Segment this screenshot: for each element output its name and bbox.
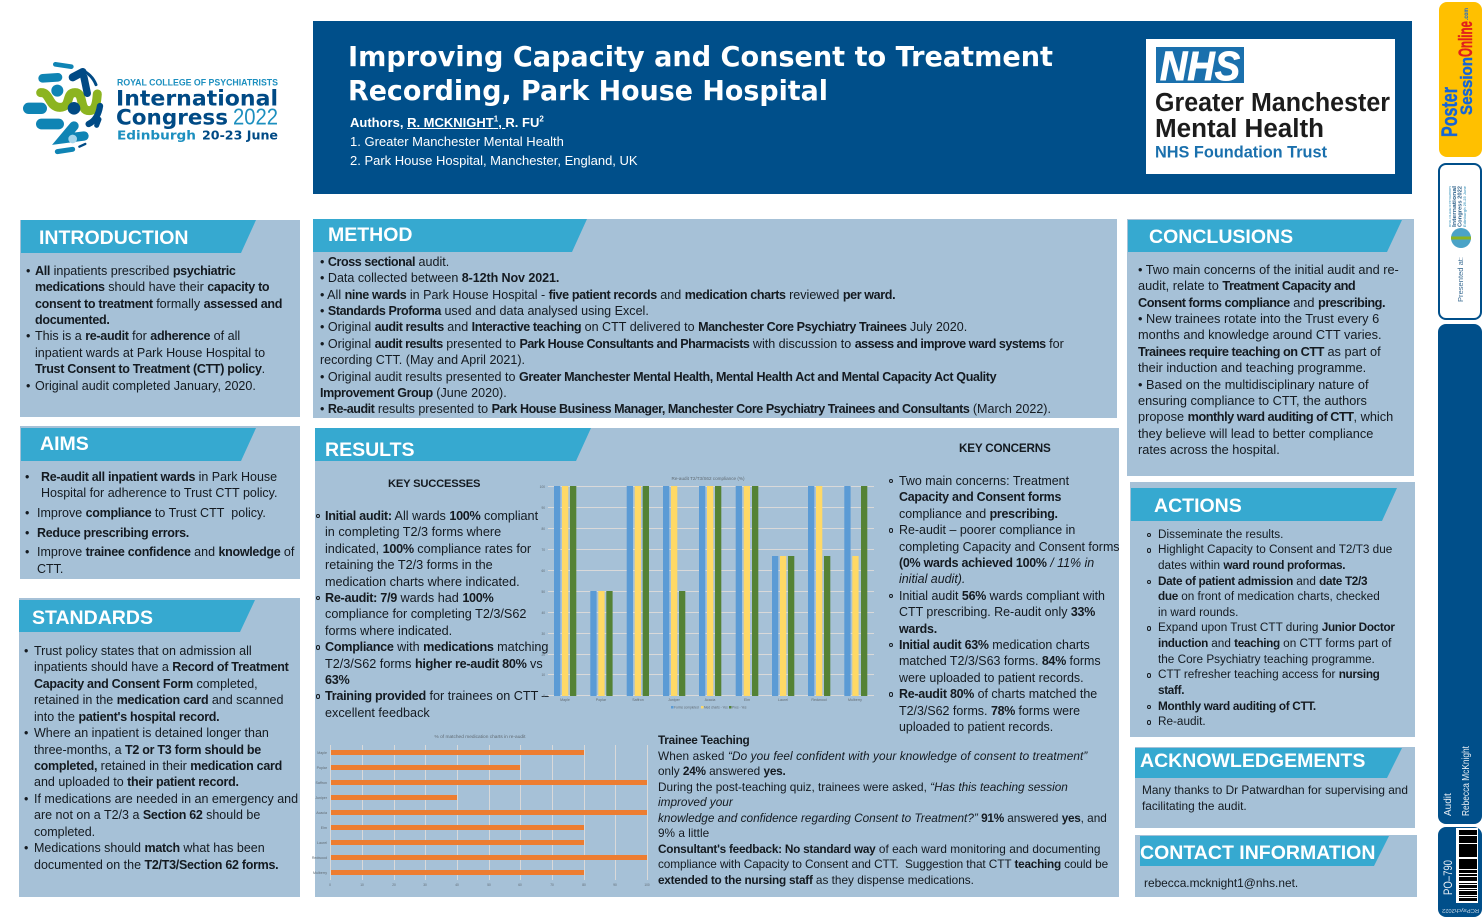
heading [19,600,255,632]
trust name [1155,89,1390,162]
key concerns list: Two main concerns: Treatment [899,474,1069,488]
logo: RCPsych International Congress 2022: ROYAL COLLEGE OF PSYCHIATRISTS [117,78,278,88]
chart legend [671,706,747,710]
text: documented. [35,313,110,327]
NHS lozenge: NHS [1160,43,1240,89]
text: • All nine wards in Park House Hospital - five patient records and medication charts reviewed per ward. [320,288,895,302]
text: • [24,841,28,855]
NHS logo [1146,39,1395,174]
heading: CONTACT INFORMATION [1140,842,1375,864]
text: • Data collected between 8-12th Nov 2021. [320,271,559,285]
heading [21,428,256,461]
text: completed. [34,825,95,839]
bar chart: re-audit compliance [540,476,874,710]
logo: RCPsych International Congress 2022: International [116,86,278,112]
text: • Based on the multidisciplinary nature of [1138,377,1369,392]
text: If medications are needed in an emergency and [34,792,298,806]
rotated label and congress mini logo: International [1452,185,1458,227]
bar chart: matched medication charts: 100 [644,883,650,887]
text: completed, retained in their medication card [34,759,282,773]
text: • [26,379,30,393]
trust name: Mental Health [1155,115,1324,143]
rotated poster number [1441,860,1479,913]
text: Re-audit. [1158,715,1206,728]
key concerns list: wards. [899,622,937,636]
key successes list [316,509,549,720]
key concerns list: Re-audit – poorer compliance in [899,523,1075,537]
bar chart: matched medication charts: Poplar [317,766,328,770]
rotated wordmark [1437,8,1477,137]
text: inpatients should have a Record of Treatment [34,660,289,674]
bar chart: matched medication charts: 70 [550,883,554,887]
key concerns list: were uploaded to patient records. [899,671,1084,685]
heading [1128,220,1402,252]
heading: INTRODUCTION [39,226,188,248]
text: months and knowledge around CTT varies. [1138,327,1382,342]
text: Where an inpatient is detained longer than [34,726,269,740]
key concerns list: Initial audit 63% medication charts [899,638,1090,652]
text: retained in the medication card and scanned [34,693,283,707]
text: • [26,264,30,278]
text: audit, relate to Treatment Capacity and [1138,278,1355,293]
authors: 1. Greater Manchester Mental Health [350,134,564,149]
text: Trainees require teaching on CTT as part of [1138,344,1381,359]
heading [1135,748,1402,778]
text: Trust Consent to Treatment (CTT) policy. [35,362,265,376]
text: • Original audit results presented to Park House Consultants and Pharmacists with discussion to assess and improve ward systems for [320,337,1064,351]
key successes list: medication charts where indicated. [325,575,520,589]
key successes list: forms where indicated. [325,624,452,638]
text: rates across the hospital. [1138,442,1280,457]
bar chart: matched medication charts: Saffron [315,781,327,785]
text: • [25,526,29,540]
bar chart: matched medication charts [312,734,650,887]
bar chart: re-audit compliance: 80 [541,527,545,531]
text: • Two main concerns of the initial audit and re- [1138,262,1399,277]
text: Expand upon Trust CTT during Junior Doctor [1158,621,1395,634]
bar chart: re-audit compliance: Juniper [668,698,681,702]
text: All inpatients prescribed psychiatric [35,264,236,278]
bar chart: re-audit compliance: Acacia [705,698,715,702]
bar chart: re-audit compliance: Maple [560,698,570,702]
bar chart: re-audit compliance: 10 [541,673,545,677]
key concerns list: Re-audit 80% of charts matched the [899,687,1097,701]
bar chart: re-audit compliance: 50 [541,590,545,594]
trainee teaching text: 9% a little [658,826,709,840]
text: • New trainees rotate into the Trust every 6 [1138,311,1379,326]
bar chart: re-audit compliance: Laurel [778,698,788,702]
heading: RESULTS [325,438,415,460]
text: consent to treatment formally assessed and [35,297,282,311]
panel: introduction [20,220,300,417]
text: Improve compliance to Trust CTT policy. [37,506,266,520]
heading: CONCLUSIONS [1149,226,1293,248]
text [1142,783,1408,813]
trainee teaching text: only 24% answered yes. [658,764,785,778]
heading: AIMS [40,432,89,454]
bar chart: matched medication charts: Elm [321,826,327,830]
rotated labels: Rebecca McKnight [1461,746,1472,816]
bar chart: matched medication charts: Juniper [315,796,328,800]
text: • Cross sectional audit. [320,255,449,269]
key successes list: Initial audit: All wards 100% compliant [325,509,538,523]
trainee teaching text [658,733,1108,887]
rotated label and congress mini logo [1448,185,1471,302]
key successes list: excellent feedback [325,706,430,720]
key concerns list: matched T2/3/S63 forms. 84% forms [899,654,1101,668]
panel: aims [20,426,300,579]
rotated poster number: PO–790 [1441,860,1455,895]
logo: RCPsych International Congress 2022 [23,62,278,154]
text: Monthly ward auditing of CTT. [1158,700,1316,713]
heading [1131,488,1397,521]
barcode [1456,828,1478,903]
rotated label and congress mini logo: Edinburgh 20-23 June [1463,186,1467,227]
bar chart: re-audit compliance: Saffron [632,698,644,702]
bar chart: matched medication charts: 0 [329,883,331,887]
trainee teaching text: improved your [658,795,733,809]
side tab: audit and author [1438,324,1482,824]
chart title: Re-audit T2/T3/S62 compliance (%) [672,476,745,481]
text: recording CTT. (May and April 2021). [320,353,525,367]
heading: ACTIONS [1154,494,1242,516]
bar chart: matched medication charts: Maple [317,751,327,755]
panel: method [313,219,1117,418]
text: the Core Psychiatry teaching programme. [1158,653,1375,666]
panel: conclusions [1127,219,1414,476]
key successes list: 63% [325,673,349,687]
text: ensuring compliance to CTT, the authors [1138,393,1367,408]
bar chart: re-audit compliance: Mulberry [848,698,862,702]
heading: key concerns: KEY CONCERNS [959,442,1051,455]
key successes list: retaining the T2/3 forms in the [325,558,493,572]
text: facilitating the audit. [1142,799,1247,813]
side tab: poster number and barcode [1438,827,1482,917]
text: Improvement Group (June 2020). [320,386,507,400]
logo: RCPsych International Congress 2022: 20-23 June [202,128,278,142]
trust name: Greater Manchester [1155,89,1390,117]
panel: contact information [1135,835,1417,897]
bar chart: re-audit compliance: 20 [541,653,545,657]
text: • Standards Proforma used and data analysed using Excel. [320,304,649,318]
bar chart: matched medication charts: 80 [582,883,586,887]
text: Many thanks to Dr Patwardhan for supervising and [1142,783,1408,797]
text: • [26,329,30,343]
text [1147,528,1395,728]
text: into the patient's hospital record. [34,710,219,724]
bar chart: matched medication charts: 40 [455,883,459,887]
text: Consent forms compliance and prescribing. [1138,295,1385,310]
heading [21,220,256,253]
key concerns list: T2/3/S62 forms. 78% forms were [899,704,1080,718]
text: Original audit completed January, 2020. [35,379,256,393]
trainee teaching text: extended to the nursing staff as they dispense medications. [658,873,974,887]
text: Highlight Capacity to Consent and T2/T3 due [1158,543,1392,556]
text: their induction and teaching programme. [1138,360,1366,375]
key successes list: T2/3/S62 forms higher re-audit 80% vs [325,657,543,671]
text: Re-audit all inpatient wards in Park House [41,470,277,484]
text: are not on a T2/3 a Section 62 should be [34,808,260,822]
text: Date of patient admission and date T2/3 [1158,575,1367,588]
rotated labels: Audit [1443,793,1454,816]
text: • [25,470,29,484]
bar chart: re-audit compliance: 70 [541,548,545,552]
text: medications should have their capacity to [35,280,269,294]
key concerns list: initial audit). [899,572,965,586]
text: CTT. [37,562,63,576]
panel: acknowledgements [1135,747,1415,828]
text: dates within ward round proformas. [1158,559,1345,572]
bar chart: matched medication charts: 50 [487,883,491,887]
key concerns list: (0% wards achieved 100% / 11% in [899,556,1094,570]
text: • Original audit results presented to Greater Manchester Mental Health, Mental Health Act and Mental Capacity Act Quality [320,370,996,384]
key successes list: Training provided for trainees on CTT – [325,689,549,703]
heading: METHOD [328,224,412,246]
trainee teaching text: When asked “Do you feel confident with your knowledge of consent to treatment” [658,749,1087,763]
key concerns list: Capacity and Consent forms [899,490,1061,504]
chart legend: Forms completed [674,706,699,710]
heading: STANDARDS [32,606,153,628]
key concerns list: CTT prescribing. Re-audit only 33% [899,605,1095,619]
bar chart: re-audit compliance: Elm [744,698,750,702]
bar chart: matched medication charts: Redwood [312,856,327,860]
bar chart: matched medication charts: 90 [613,883,617,887]
key successes list: indicated, 100% compliance rates for [325,542,531,556]
panel: results [315,428,1119,897]
text: rebecca.mcknight1@nhs.net. [1144,876,1298,890]
text: • [25,506,29,520]
trust name: NHS Foundation Trust [1155,142,1327,162]
text: Hospital for adherence to Trust CTT policy. [41,486,277,500]
text: • [24,644,28,658]
rotated label and congress mini logo: Presented at: [1456,257,1465,302]
text: propose monthly ward auditing of CTT, which [1138,409,1393,424]
trainee teaching text: knowledge and confidence regarding Consent to Treatment?” 91% answered yes, and [658,811,1107,825]
rotated label and congress mini logo: ROYAL COLLEGE OF PSYCHIATRISTS [1448,186,1452,227]
bar chart: re-audit compliance: 0 [543,694,545,698]
bar chart: matched medication charts: 30 [423,883,427,887]
bar chart: matched medication charts: 20 [392,883,396,887]
key concerns list: completing Capacity and Consent forms [899,540,1120,554]
text: • Original audit results and Interactive teaching on CTT delivered to Manchester Core Psychiatry Trainees July 2020. [320,320,967,334]
trainee teaching text: compliance with Capacity to Consent and CTT. Suggestion that CTT teaching could be [658,857,1108,871]
text: induction and teaching on CTT forms part of [1158,637,1391,650]
heading [1140,836,1389,866]
key successes list: compliance for completing T2/3/S62 [325,607,526,621]
logo: RCPsych International Congress 2022: 2022 [233,104,278,130]
text: • [25,545,29,559]
bar chart: re-audit compliance: 90 [541,506,545,510]
key successes list: Compliance with medications matching [325,640,548,654]
text: and uploaded to their patient record. [34,775,239,789]
text: they believe will lead to better compliance [1138,426,1373,441]
text: Capacity and Consent Form completed, [34,677,258,691]
text: • [24,726,28,740]
text: inpatient wards at Park House Hospital to [35,346,265,360]
side tab: Poster Session Online [1439,2,1482,157]
text: Reduce prescribing errors. [37,526,189,540]
chart title: % of matched medication charts in re-audit [435,734,526,740]
key concerns list [889,474,1120,734]
heading: key successes: KEY SUCCESSES [388,478,480,490]
text: three-months, a T2 or T3 form should be [34,742,261,756]
text [1138,262,1399,457]
bar chart: re-audit compliance: 60 [541,569,545,573]
text: This is a re-audit for adherence of all [35,329,240,343]
text: CTT refresher teaching access for nursing [1158,668,1380,681]
bar chart: re-audit compliance: Poplar [596,698,607,702]
rotated labels [1443,746,1472,816]
bar chart: re-audit compliance: 40 [541,611,545,615]
text [24,644,298,872]
header banner [313,21,1412,194]
title [348,40,1053,107]
bar chart: re-audit compliance: 30 [541,632,545,636]
text: Improve trainee confidence and knowledge of [37,545,294,559]
text: staff. [1158,684,1184,697]
logo: RCPsych International Congress 2022: Congress [116,106,228,130]
text: documented on the T2/T3/Section 62 forms. [34,858,278,872]
authors: 2. Park House Hospital, Manchester, England, UK [350,153,638,168]
text: • [24,792,28,806]
panel: actions [1130,482,1415,737]
key concerns list: Initial audit 56% wards compliant with [899,589,1105,603]
heading: ACKNOWLEDGEMENTS [1140,750,1365,772]
bar chart: matched medication charts: Acacia [316,811,327,815]
key concerns list: compliance and prescribing. [899,507,1058,521]
title: Improving Capacity and Consent to Treatment [348,40,1053,73]
chart legend: Med charts - Yes [704,706,728,710]
bar chart: matched medication charts: Mulberry [313,871,327,875]
bar chart: matched medication charts: 10 [360,883,364,887]
key concerns list: uploaded to patient records. [899,720,1053,734]
panel: standards [19,598,300,897]
bar chart: re-audit compliance: 100 [540,485,545,489]
text: Medications should match what has been [34,841,265,855]
heading [315,428,591,461]
trainee teaching text: Trainee Teaching [658,733,750,747]
authors: Authors, R. MCKNIGHT1, R. FU2 [350,115,544,130]
title: Recording, Park House Hospital [348,74,828,107]
key successes list: Re-audit: 7/9 wards had 100% [325,591,493,605]
bar chart: re-audit compliance: Redwood [811,698,827,702]
text: Disseminate the results. [1158,528,1283,541]
text: • Re-audit results presented to Park House Business Manager, Manchester Core Psychiatry Trainees and Consultants (March 2022). [320,402,1051,416]
bar chart: matched medication charts: 60 [518,883,522,887]
text [320,255,1064,416]
rotated poster number: RCPsych2022 [1442,907,1479,913]
text: in ward rounds. [1158,606,1238,619]
text: Trust policy states that on admission all [34,644,252,658]
text [25,470,294,576]
heading [313,219,587,252]
chart legend: Pres - Yes [732,706,747,710]
rotated label and congress mini logo: Congress 2022 [1458,186,1464,227]
rotated wordmark: Poster [1437,87,1462,137]
authors [350,115,638,168]
rotated wordmark: Session [1457,57,1476,115]
trainee teaching text: Consultant's feedback: No standard way of each ward monitoring and documenting [658,842,1100,856]
bar chart: matched medication charts: Laurel [317,841,327,845]
text [26,264,282,393]
key successes list: in completing T2/3 forms where [325,525,501,539]
logo: RCPsych International Congress 2022: Edinburgh [117,128,196,142]
side tab: presented at [1438,163,1482,320]
rotated wordmark: .com [1464,8,1470,20]
text: due on front of medication charts, checked [1158,590,1380,603]
trainee teaching text: During the post-teaching quiz, trainees were asked, “Has this teaching session [658,780,1068,794]
